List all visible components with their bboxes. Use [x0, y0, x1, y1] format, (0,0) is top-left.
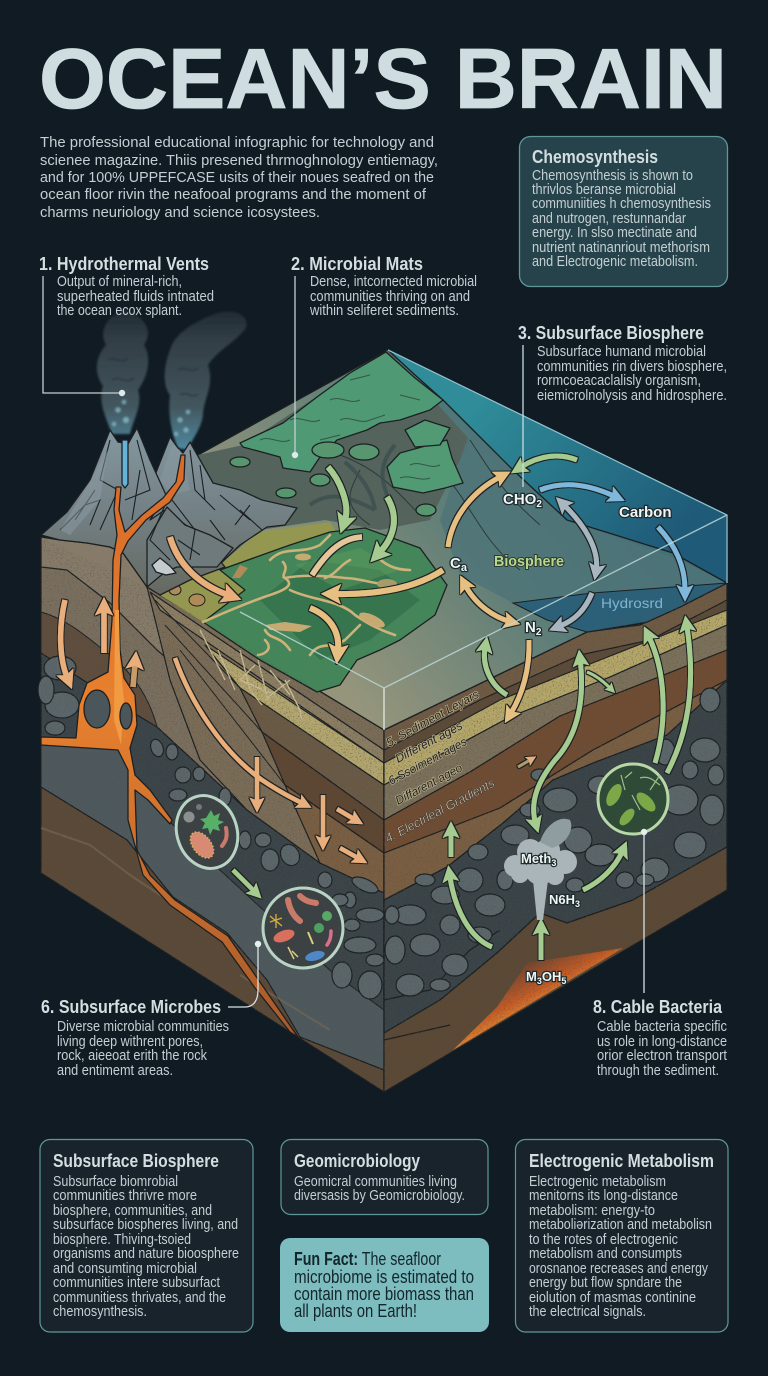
callout 1: hydrothermal vents: 1. Hydrothermal Vents	[39, 254, 209, 274]
arrow: curved up	[450, 877, 492, 947]
intro text block: ocean floor rivin the neafooal programs and the moment of	[40, 187, 427, 203]
arrow: small up	[448, 833, 454, 857]
callout 6: subsurface microbes: rock, aieeoat erith the rock	[57, 1048, 208, 1064]
cycle labels: 2	[536, 627, 542, 638]
arrow: bacteria up two	[667, 627, 691, 773]
arrow: right two	[340, 848, 358, 858]
cycle labels: Hydrosrd	[601, 595, 663, 611]
arrow: right one	[337, 809, 354, 819]
panel: chemosynthesis: and Electrogenic metabolism.	[532, 254, 698, 270]
arrows: biogeochemical cycle	[448, 456, 685, 713]
cycle labels	[450, 491, 672, 986]
panel: fun fact: contain more biomass than	[294, 1284, 474, 1304]
callout 1: hydrothermal vents	[39, 254, 214, 396]
callout 8: cable bacteria: 8. Cable Bacteria	[593, 997, 723, 1017]
panel: subsurface biosphere: biosphere. Thiving-tsoied	[53, 1232, 191, 1248]
callout 2: microbial mats: Dense, intcornected microbial	[310, 274, 477, 290]
cable bacteria lens	[598, 764, 668, 834]
volcano mountains	[41, 428, 297, 595]
panel: fun fact: all plants on Earth!	[294, 1301, 417, 1321]
panel: electrogenic metabolism: metaboliərization and metabolisn	[529, 1217, 712, 1233]
panel: subsurface biosphere: communities thrivre more	[53, 1188, 197, 1204]
lava conduit	[41, 440, 298, 1037]
cycle labels: Carbon	[619, 504, 672, 521]
panel: geomicrobiology: Geomicrobiology	[294, 1151, 420, 1171]
panel: chemosynthesis: thrivlos beranse microbial	[532, 182, 676, 198]
arrow: between microbe circles	[233, 870, 254, 891]
panel: subsurface biosphere: and consumting microbial	[53, 1261, 197, 1277]
arrow: up	[101, 610, 107, 653]
arrow: Ca N2 double	[464, 583, 512, 622]
arrow: vent up	[538, 930, 544, 960]
callout 3: subsurface biosphere: rormcoeacaclalisly organism,	[537, 373, 701, 389]
arrow: mat flow left	[328, 467, 346, 520]
arrow: branch	[587, 672, 610, 688]
callout 6: subsurface microbes: 6. Subsurface Microbes	[41, 997, 221, 1017]
arrow: N2 down	[511, 640, 529, 713]
callout 6: subsurface microbes: Diverse microbial communities	[57, 1019, 229, 1035]
arrow: Carbon down	[658, 527, 685, 590]
lower green microbial mat	[169, 528, 447, 692]
callout 6: subsurface microbes: and entimemt areas.	[57, 1063, 173, 1079]
microbial roots in sediment	[200, 630, 302, 720]
arrow: mat arc	[312, 537, 362, 575]
arrow: to bacteria	[583, 852, 622, 890]
sediment wedge layers, left side	[147, 587, 384, 893]
cycle labels: 3	[537, 976, 542, 986]
panel: subsurface biosphere: Subsurface biomrobial	[53, 1174, 178, 1190]
panel: electrogenic metabolism: the electrical signals.	[529, 1304, 646, 1320]
cycle labels: 5	[561, 976, 566, 986]
arrow: to N2	[560, 593, 592, 626]
callout 8: cable bacteria	[593, 829, 727, 1079]
cycle labels: N6H	[549, 892, 575, 907]
arrows: orange left side	[61, 600, 358, 891]
sediment layer labels: 5. Sedimeot Leyars	[384, 687, 481, 750]
callout 6: subsurface microbes	[41, 941, 261, 1079]
panel: electrogenic metabolism: Electrogenic metabolism	[529, 1174, 666, 1190]
panel: chemosynthesis: energy. In slso mectinate and	[532, 225, 697, 241]
cycle labels: 3	[551, 858, 556, 868]
panel: electrogenic metabolism: metabolism: energy-to	[529, 1203, 655, 1219]
callout 3: subsurface biosphere: Subsurface humand microbial	[537, 344, 706, 360]
cycle labels: Meth	[521, 851, 551, 866]
sediment layer labels: Diffarent ageo	[393, 760, 465, 808]
arrow: long green to methane	[534, 658, 582, 825]
callout 2: microbial mats: 2. Microbial Mats	[291, 254, 423, 274]
panel: chemosynthesis: communiities h chemosynthesis	[532, 196, 711, 212]
callout 2: microbial mats: within seliferet sediments.	[309, 303, 459, 319]
upper microbial mat	[230, 352, 463, 516]
panel: electrogenic metabolism: orosnanoe recreases and energy	[529, 1261, 709, 1277]
callout 3: subsurface biosphere: 3. Subsurface Biosphere	[518, 323, 704, 343]
panel: subsurface biosphere: biosphere, communities, and	[53, 1203, 212, 1219]
callout 6: subsurface microbes: living deep withrent pores,	[57, 1034, 203, 1050]
panel: chemosynthesis: and nutrogen, restunnandar	[532, 211, 686, 227]
panel: subsurface biosphere: Subsurface Biosphere	[53, 1151, 219, 1171]
cycle labels: OH	[542, 969, 561, 984]
callout 8: cable bacteria: orior electron transport	[597, 1048, 727, 1064]
cycle labels: 3	[575, 899, 580, 909]
arrow: Ca to CHO2	[448, 477, 500, 547]
panel: electrogenic metabolism: eiolution of masmas continine	[529, 1290, 696, 1306]
arrow: into mat	[335, 570, 443, 594]
panel: fun fact: Fun Fact: The seafloor	[294, 1249, 441, 1269]
panel: subsurface biosphere: subsurface biospheres living, and	[53, 1217, 238, 1233]
cycle labels: N	[525, 619, 536, 636]
arrow: CHO2 to Hydro double	[562, 503, 597, 572]
panel: subsurface biosphere: communities intere subsurfact	[53, 1275, 220, 1291]
panel: subsurface biosphere: organisms and nature bioosphere	[53, 1246, 239, 1262]
arrows: green transport	[450, 627, 691, 960]
methane cloud	[504, 819, 577, 920]
panel: geomicrobiology: Geomicral communities living	[294, 1174, 457, 1190]
panel: geomicrobiology	[281, 1140, 488, 1214]
arrow: CHO2 to Carbon	[540, 485, 614, 496]
title: OCEAN’S BRAIN	[39, 32, 727, 127]
panel: subsurface biosphere	[40, 1140, 253, 1332]
arrow: faint tan	[518, 760, 530, 767]
intro text block	[40, 135, 438, 221]
callout 8: cable bacteria: us role in long-distance	[597, 1034, 727, 1050]
panel: chemosynthesis	[520, 136, 728, 286]
panel: chemosynthesis: Chemosynthesis is shown to	[532, 168, 693, 184]
rock cobbles, both faces	[38, 656, 724, 999]
panel: subsurface biosphere: chemosynthesis.	[53, 1304, 147, 1320]
arrow: top green	[521, 456, 577, 467]
intro text block: charms neuriology and science icosystees.	[40, 205, 320, 221]
intro text block: and for 100% UPPEFCASE usits of their noues seafred on the	[40, 170, 434, 186]
sediment layer labels: 6.Ssoiment ages	[386, 734, 469, 788]
callout 2: microbial mats: communities thriving on and	[310, 289, 470, 305]
callout 1: hydrothermal vents: superheated fluids intnated	[57, 289, 214, 305]
icon: smoke plumes	[97, 310, 246, 450]
cycle labels: Biosphere	[494, 554, 564, 570]
callout 3: subsurface biosphere: eiemicrolnolysis and hidrosphere.	[537, 388, 727, 404]
sediment layer labels: Different ages	[393, 719, 465, 766]
arrow: down one	[255, 757, 259, 802]
rock pockets inside lava	[84, 690, 132, 729]
panel: electrogenic metabolism: metabolism and consumpts	[529, 1246, 682, 1262]
cycle labels: CHO	[503, 491, 536, 508]
intro text block: scienee magazine. Thiis presened thrmoghnology entiemagy,	[40, 153, 438, 169]
callout 3: subsurface biosphere: communities rin divers biosphere,	[537, 359, 727, 375]
block: right face	[384, 583, 727, 1092]
arrow: down two	[321, 795, 325, 840]
panel: electrogenic metabolism: Electrogenic Metabolism	[529, 1151, 714, 1171]
cycle labels: C	[450, 555, 461, 572]
speckle texture	[41, 530, 731, 1095]
callout 8: cable bacteria: Cable bacteria specific	[597, 1019, 727, 1035]
glass case edges	[240, 350, 727, 730]
callout 1: hydrothermal vents: Output of mineral-rich,	[57, 274, 182, 290]
cycle labels: 2	[536, 499, 542, 510]
cycle labels: M	[526, 969, 537, 984]
seafloor top surface	[147, 350, 727, 730]
arrows: surface flows	[170, 467, 443, 650]
panel: chemosynthesis: nutrient natinanriout methorism	[532, 240, 710, 256]
panel: geomicrobiology: diversasis by Geomicrobiology.	[294, 1188, 465, 1204]
microbe lens: upper left	[167, 788, 247, 876]
panel: fun fact: microbiome is estimated to	[294, 1267, 474, 1287]
callout 3: subsurface biosphere	[518, 323, 727, 487]
arrow: left down	[61, 600, 67, 677]
arrow: long descent	[175, 658, 302, 803]
callout 1: hydrothermal vents: the ocean ecox splant.	[57, 303, 182, 319]
panel: electrogenic metabolism: to the rotes of electrogenic	[529, 1232, 678, 1248]
arrow: small up	[133, 664, 135, 687]
sediment layer labels	[382, 687, 498, 846]
panel: electrogenic metabolism: energy but flow spndare the	[529, 1275, 682, 1291]
sediment layer labels: 4. Electrleal Gradients	[382, 775, 498, 846]
panel: subsurface biosphere: communitiess thrivates, and the	[53, 1290, 226, 1306]
panel: fun fact	[280, 1238, 489, 1332]
microbe lens: lower	[263, 888, 343, 968]
panel: electrogenic metabolism: menitorns its long-distance	[529, 1188, 678, 1204]
cycle labels: a	[461, 562, 468, 574]
callout 8: cable bacteria: through the sediment.	[597, 1063, 719, 1079]
panel: chemosynthesis: Chemosynthesis	[532, 147, 658, 167]
panel: electrogenic metabolism	[516, 1140, 728, 1332]
block: left face	[41, 537, 384, 1092]
callout 2: microbial mats	[291, 254, 477, 458]
intro text block: The professional educational infographic for technology and	[40, 135, 434, 151]
arrow: bacteria up one	[649, 637, 663, 763]
arrow: green hook	[484, 648, 507, 695]
water body	[388, 350, 727, 583]
hydrosphere dark sediment wedge	[513, 583, 727, 632]
